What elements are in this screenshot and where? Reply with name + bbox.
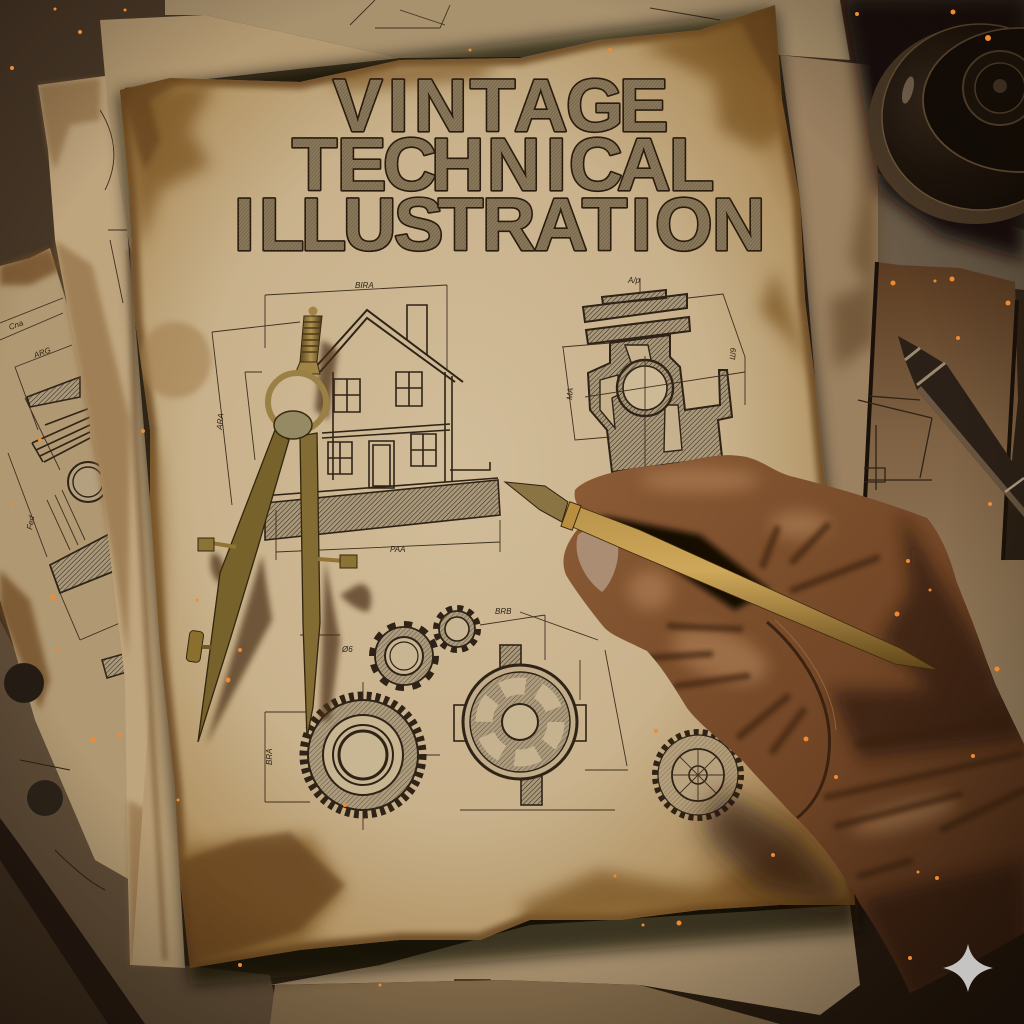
right sheet drawing: [858, 396, 932, 490]
sheet: bottom left: [0, 620, 280, 1024]
right gear: [655, 732, 741, 818]
sheet shadow: [118, 10, 860, 985]
hand shadow: [700, 790, 860, 910]
compass shadow: [206, 340, 371, 745]
side knob: [186, 630, 212, 663]
gloved hand: [505, 455, 1024, 1000]
title line 1: VINTAGE: [333, 64, 668, 147]
small fitting: [4, 663, 44, 703]
inkwell: [845, 0, 1024, 260]
top plates: [583, 290, 690, 344]
sheet: right back: [780, 55, 878, 500]
large gear: [304, 696, 422, 814]
glove shading: [600, 468, 1024, 1000]
desk tones around inkwell: [870, 170, 1024, 290]
house outline: [313, 310, 463, 382]
title: [234, 64, 765, 266]
dark corner: [845, 0, 1024, 260]
sheet: left upper: [100, 15, 400, 968]
inkwell highlight: [900, 75, 916, 105]
house foundation hatch: [265, 480, 500, 540]
machine part blueprint: [562, 276, 745, 472]
stitched seam: [767, 622, 829, 818]
machine part blueprint: Ш9: [728, 347, 738, 360]
far right edge gap: [865, 262, 1017, 560]
sheet: top back: [165, 0, 850, 60]
bottom sheet drawing: [455, 980, 630, 1024]
highlights: [628, 468, 961, 841]
inkwell base: [868, 26, 1024, 224]
faint bottom-left drawing: [20, 760, 105, 890]
sheet top drawing: [350, 0, 720, 28]
gears blueprint: [265, 607, 741, 830]
dark pen: [0, 818, 145, 1024]
left upper sheet edge: [130, 250, 165, 960]
left middle sheet stains: [38, 78, 170, 965]
left lower sheet drawing: ARG: [32, 345, 52, 360]
bore circle: [585, 356, 745, 470]
sheet: far right: [865, 262, 1024, 760]
tide stain: [139, 322, 211, 398]
creases: [650, 526, 1024, 876]
sheet: left middle: [38, 76, 180, 965]
house blueprint: [212, 281, 500, 560]
small knob: [27, 780, 63, 816]
machine part blueprint: A/p: [627, 276, 641, 285]
house ground line: [262, 478, 498, 496]
small gear 2: [436, 608, 478, 650]
right leg: [300, 433, 320, 738]
handle: [295, 306, 322, 374]
house blueprint: PAA: [390, 545, 405, 554]
windows and door: [328, 372, 436, 488]
sheet: bottom back: [270, 980, 780, 1024]
right back sheet stain: [830, 70, 878, 370]
dimension lines: [212, 285, 500, 560]
gears blueprint: BRB: [495, 607, 512, 616]
house blueprint: BIRA: [355, 281, 374, 290]
left lower sheet drawing: Cna: [8, 318, 25, 332]
house blueprint: ARA: [215, 413, 225, 431]
flanged wheel: [454, 645, 586, 805]
sheet: left lower: [0, 248, 130, 880]
burnt edge and stains: [120, 5, 855, 968]
hinge: [274, 411, 312, 439]
left leg: [198, 430, 289, 742]
title line 3: ILLUSTRATION: [234, 183, 765, 266]
left lower sheet drawing: Fed: [25, 515, 36, 530]
compass: [186, 306, 371, 745]
left middle sheet drawing: [100, 110, 130, 303]
scorched rim: [120, 5, 855, 968]
gears blueprint: BRA: [265, 749, 274, 765]
gear dimensions: [265, 612, 628, 830]
sheet body: [120, 5, 855, 968]
adjustment screws: [205, 542, 345, 561]
thumbnail: [577, 529, 618, 592]
palm cavity: [600, 515, 770, 610]
pen ferrule and nib: [505, 482, 581, 530]
small gear 1: [373, 625, 435, 687]
dark shading: [830, 510, 1024, 1000]
title line 2: TECHNICAL: [292, 123, 714, 206]
machine dimensions: [562, 278, 745, 440]
ring: [268, 373, 326, 431]
inkwell lid ring: [923, 28, 1024, 172]
inkwell body: [882, 24, 1024, 210]
watermark star: [943, 944, 993, 992]
sheet: bottom: [270, 905, 860, 1015]
glove: [563, 455, 1024, 993]
left bottom tools: [0, 663, 145, 1024]
machine part blueprint: MA: [565, 387, 575, 400]
left lower sheet drawing: [0, 298, 127, 678]
pen barrel: [568, 505, 938, 670]
left lower sheet stain: [0, 248, 60, 710]
gears blueprint: Ø6: [341, 645, 353, 654]
dark stain rim: [122, 8, 785, 965]
inner cutouts: [600, 345, 682, 452]
body: [588, 335, 732, 472]
right side pen: [898, 336, 1024, 517]
main paper sheet: [118, 5, 860, 985]
